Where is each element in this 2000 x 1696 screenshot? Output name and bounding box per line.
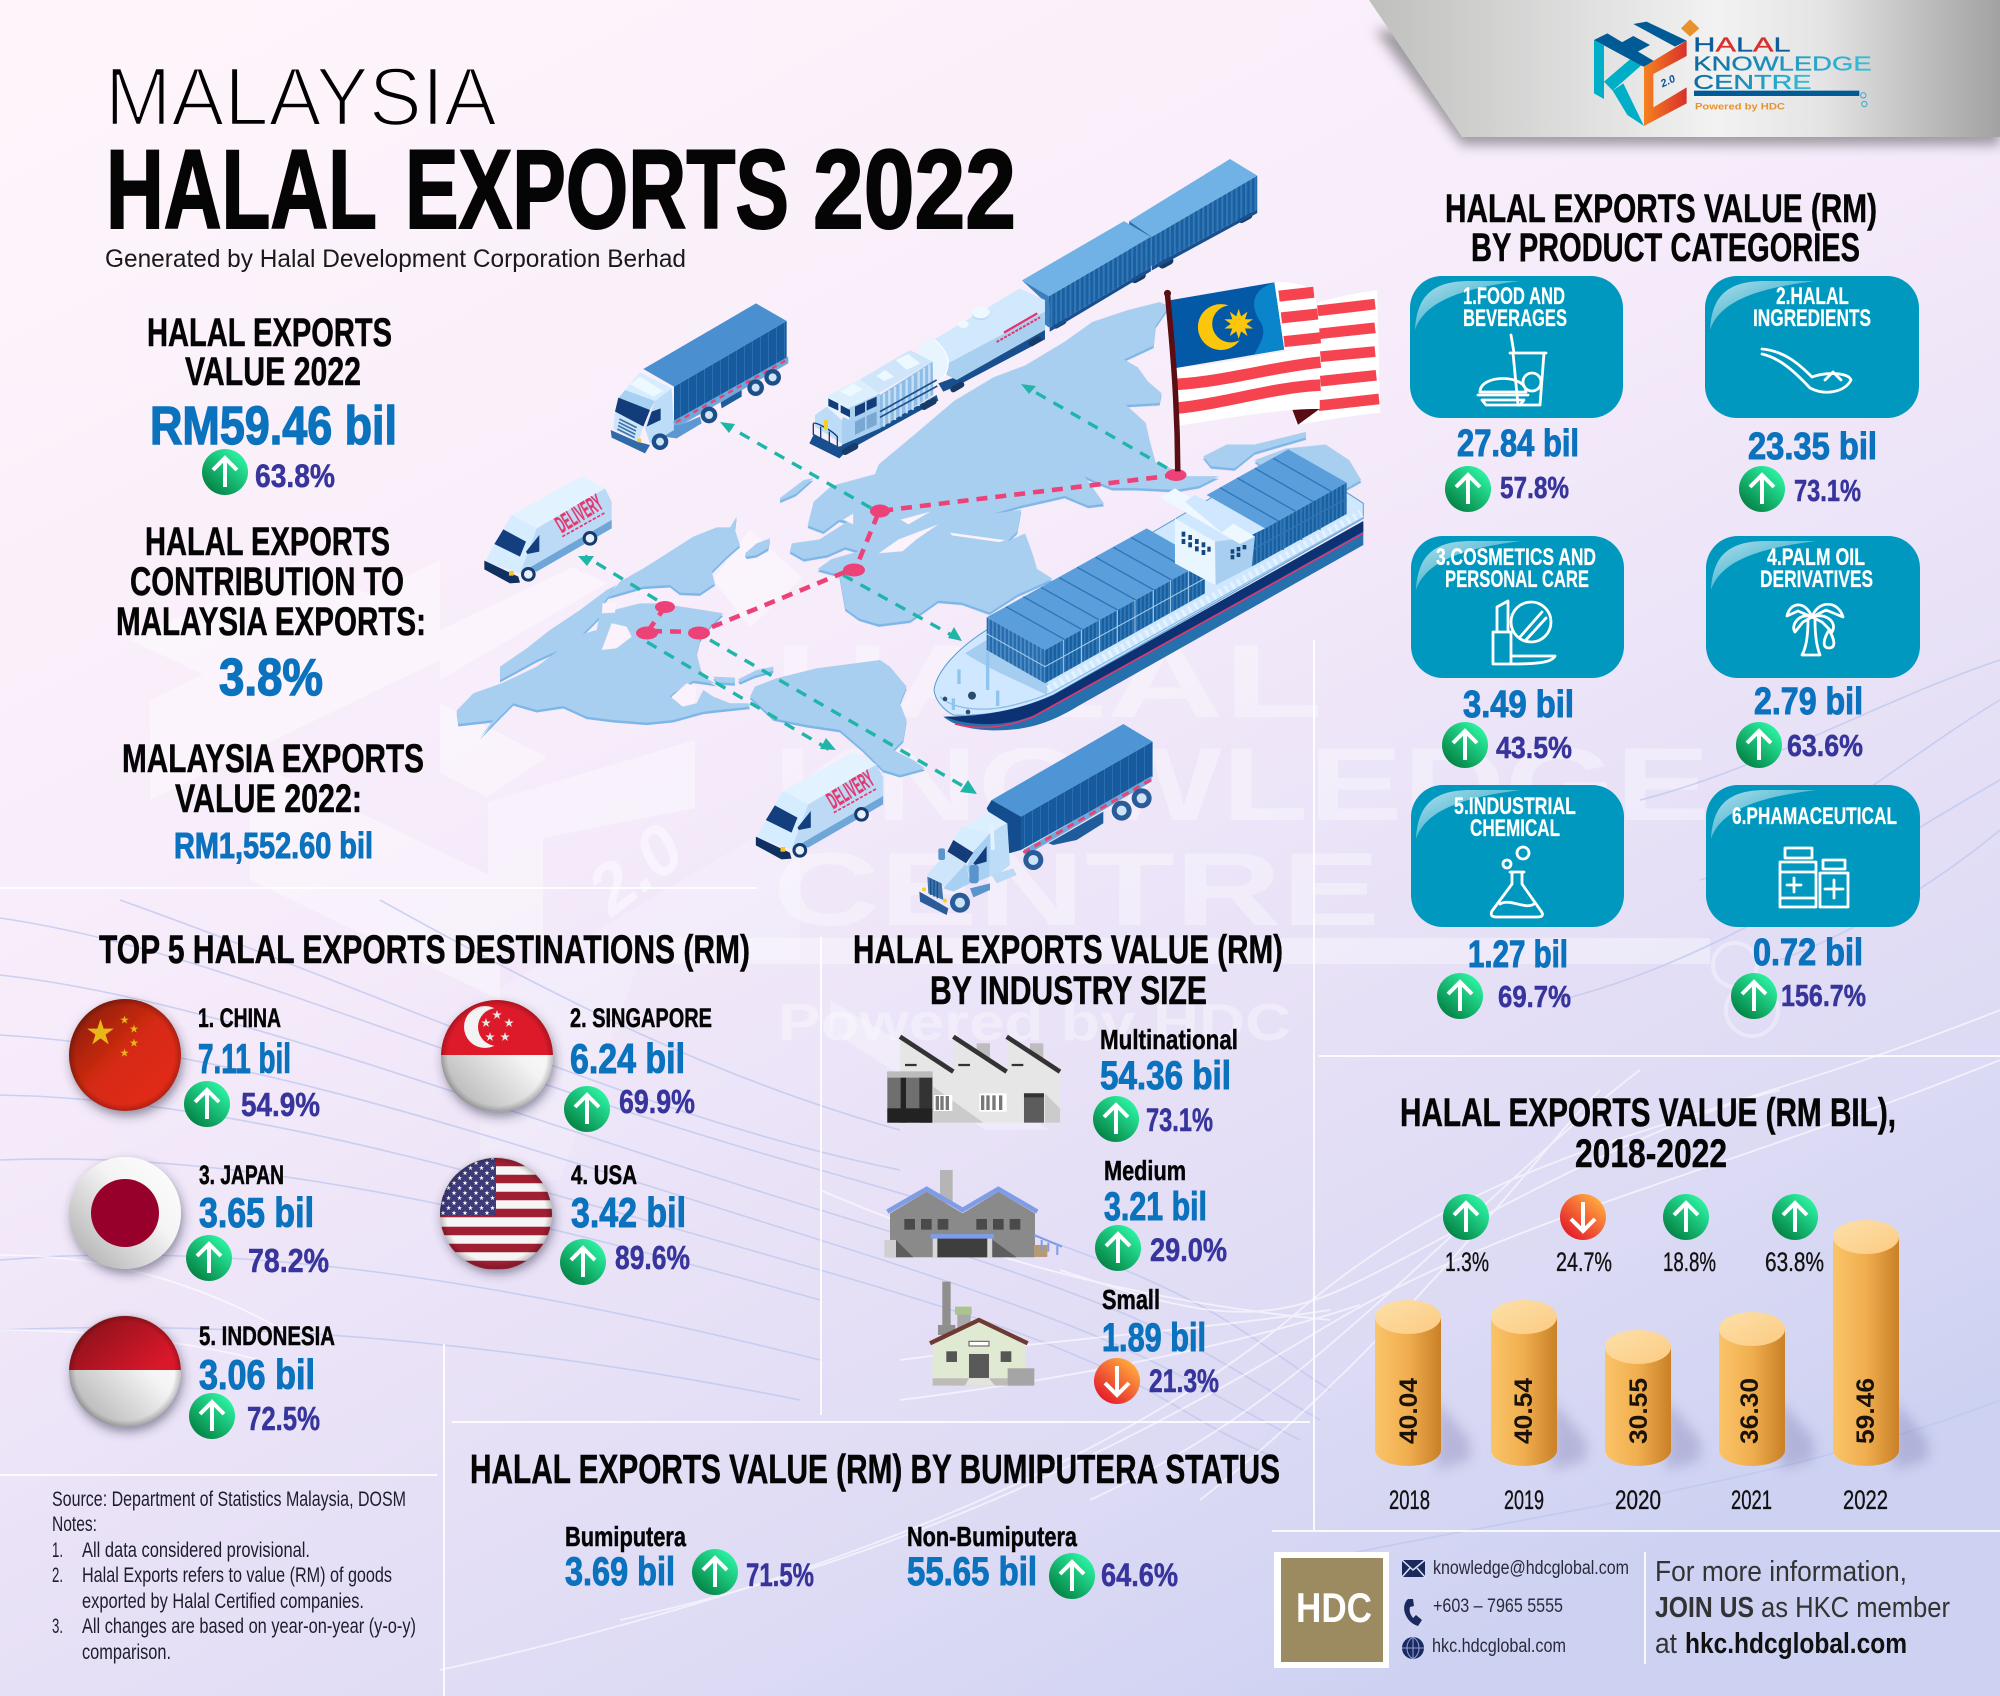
call to action: hkc.hdcglobal.com [1685,1628,1907,1660]
stat: Malaysia exports value 2022: MALAYSIA EXPORTS [122,737,424,781]
card: industrial chemical: 5.INDUSTRIAL [1454,793,1576,820]
year axis labels: 2019 [1504,1485,1544,1515]
title: Generated by Halal Development Corporation Berhad [105,245,686,273]
icon: lipstick and compact [1493,601,1555,664]
destination: China [69,999,320,1127]
icon: China flag [69,999,181,1111]
stat: medium: Medium [1104,1155,1186,1186]
card: food and beverages: 57.8% [1500,470,1569,505]
chart: yearly change indicators [1443,1194,1824,1277]
stat: halal exports value 2022: 63.8% [255,458,335,494]
card: industrial chemical [1411,785,1624,1019]
year axis labels: 2022 [1843,1485,1888,1515]
card: halal ingredients: 23.35 bil [1748,426,1877,468]
year axis labels [1389,1485,1888,1515]
background flowing wave lines [0,660,2000,1670]
bar 2021 [1719,1312,1785,1466]
icon: globe [1402,1637,1424,1659]
teal arrow heads [578,384,1036,794]
icon: medicine bottles [1780,848,1848,907]
stat: multinational [1093,1024,1238,1142]
icon: Singapore flag [441,1000,553,1112]
section heading: top 5 destinations: TOP 5 HALAL EXPORTS DESTINATIONS (RM) [99,928,750,972]
card: pharmaceutical: 0.72 bil [1753,932,1863,974]
container ship [934,449,1363,730]
call to action: at [1655,1628,1677,1660]
bar 2020 [1605,1330,1671,1466]
icon: spoon [1762,349,1851,392]
icon: small factory [930,1282,1034,1386]
watermark: HALAL KNOWLEDGE CENTRE wordmark: KNOWLEDGE [773,727,1710,843]
chart: yearly change indicators: 24.7% [1556,1247,1612,1277]
stat: contribution to Malaysia exports: MALAYSIA EXPORTS: [116,600,426,644]
icon: palm tree with drop [1787,604,1843,655]
stat: contribution to Malaysia exports: CONTRIBUTION TO [130,560,404,604]
watermark: HALAL KNOWLEDGE CENTRE wordmark: Powered by HDC [778,994,1291,1052]
card: halal ingredients: 2.HALAL [1776,283,1849,310]
stat: Malaysia exports value 2022: VALUE 2022: [175,777,362,821]
stat: contribution to Malaysia exports: 3.8% [219,649,323,707]
truck bottom cab [919,812,1017,915]
world map [457,302,1361,775]
stat: Bumiputera: Bumiputera [565,1521,686,1552]
year axis labels: 2021 [1731,1485,1772,1515]
title: HALAL [106,127,377,252]
stat: Non-Bumiputera: Non-Bumiputera [907,1521,1077,1552]
logo: Halal Knowledge Centre: CENTRE [1693,71,1812,94]
icon: multinational factory [887,1037,1060,1123]
card: cosmetics and personal care [1411,536,1624,768]
destination: Singapore [441,1000,712,1132]
card: cosmetics and personal care: 3.49 bil [1463,684,1574,726]
call to action [1655,1556,1950,1660]
card: food and beverages: 1.FOOD AND [1463,283,1565,310]
icon: USA flag [440,1156,552,1269]
card: palm oil derivatives: 63.6% [1787,728,1863,763]
card: halal ingredients [1705,276,1919,512]
title: 2022 [813,127,1016,252]
cargo train: wagons [1022,159,1257,332]
section heading: yearly chart: 2018-2022 [1575,1132,1727,1176]
card: industrial chemical: CHEMICAL [1470,815,1560,842]
icon: Indonesia flag [69,1315,181,1427]
section heading: product categories: BY PRODUCT CATEGORIES [1471,226,1860,270]
destination: Indonesia: 72.5% [247,1400,320,1437]
stat: halal exports value 2022: VALUE 2022 [185,350,361,394]
destination: Japan: 78.2% [248,1242,329,1279]
card: food and beverages: 27.84 bil [1457,423,1579,465]
card: halal ingredients: 73.1% [1794,473,1861,508]
year axis labels: 2020 [1615,1485,1661,1515]
bar 2021: 36.30 [1736,1378,1764,1444]
stat: halal exports value 2022: HALAL EXPORTS [147,311,392,355]
bar 2018: 40.04 [1395,1378,1423,1444]
divider lines [0,640,2000,1696]
logo: HDC: HDC [1296,1584,1372,1631]
destination: Indonesia: 3.06 bil [199,1351,315,1398]
source and notes: Notes: [52,1513,97,1536]
card: palm oil derivatives [1706,536,1920,768]
destination: USA: 89.6% [615,1239,690,1276]
delivery van 2 [756,752,883,859]
stat: Bumiputera [565,1521,814,1595]
bar 2022: 59.46 [1852,1378,1880,1444]
year axis labels: 2018 [1389,1485,1430,1515]
stat: Non-Bumiputera: 55.65 bil [907,1550,1037,1594]
source and notes [52,1488,416,1664]
source and notes: Source: Department of Statistics Malaysia, DOSM [52,1488,406,1511]
bar 2022 [1833,1220,1899,1466]
logo: Halal Knowledge Centre: Powered by HDC [1695,101,1786,111]
stat: multinational: Multinational [1100,1024,1238,1055]
source and notes: All data considered provisional. [82,1539,310,1562]
stat: contribution to Malaysia exports [116,520,426,707]
section heading: by industry size: HALAL EXPORTS VALUE (RM) [853,928,1283,972]
source and notes: comparison. [82,1641,171,1664]
icon: medium factory [884,1170,1062,1257]
delivery van 2: DELIVERY [822,766,879,814]
card: pharmaceutical: 6.PHAMACEUTICAL [1732,803,1897,830]
watermark: 2.0: 2.0 [572,808,698,931]
destination: China: 54.9% [241,1086,320,1123]
source and notes: exported by Halal Certified companies. [82,1590,364,1613]
chart: cylinder bars 2018-2022 [1375,1220,1928,1515]
destination: Japan: 3. JAPAN [199,1160,284,1190]
chart: yearly change indicators: 1.3% [1445,1247,1489,1277]
truck bottom trailer [987,724,1153,870]
source and notes: 3. [52,1615,63,1638]
destination: Japan [69,1157,329,1281]
bar 2019 [1491,1300,1557,1466]
card: cosmetics and personal care: 43.5% [1496,730,1572,765]
card: food and beverages: BEVERAGES [1463,305,1567,332]
chart: yearly change indicators: 63.8% [1765,1247,1824,1277]
card: palm oil derivatives: 2.79 bil [1754,681,1863,723]
source and notes: All changes are based on year-on-year (y-o-y) [82,1615,416,1638]
truck top [611,303,788,453]
bar 2018 [1375,1300,1441,1466]
card: industrial chemical: 1.27 bil [1468,934,1568,976]
stat: Malaysia exports value 2022: RM1,552.60 bil [174,825,373,866]
title: EXPORTS [405,127,789,252]
destination: Singapore: 2. SINGAPORE [570,1003,712,1033]
stat: contribution to Malaysia exports: HALAL EXPORTS [145,520,390,564]
icon: phone [1404,1599,1422,1626]
logo: HDC [1274,1552,1389,1668]
destination: USA [440,1156,690,1285]
delivery van 1 [484,476,612,583]
section heading: by industry size [853,928,1283,1013]
icon: Japan flag [69,1157,181,1269]
stat: small: 1.89 bil [1102,1316,1206,1360]
watermark: HALAL KNOWLEDGE CENTRE wordmark [600,624,1778,1052]
card: pharmaceutical [1706,785,1920,1019]
destination: USA: 3.42 bil [571,1189,686,1236]
icon: email [1402,1560,1425,1577]
destination: Indonesia [69,1315,335,1439]
card: food and beverages [1410,276,1623,512]
logo: Halal Knowledge Centre: KNOWLEDGE [1693,53,1872,76]
icon: chemistry flask [1491,847,1542,917]
stat: medium [1095,1155,1227,1271]
logo: Halal Knowledge Centre: HALAL [1693,34,1791,57]
delivery van 1: DELIVERY [551,490,608,538]
destination: Indonesia: 5. INDONESIA [199,1321,335,1351]
contact details: hkc.hdcglobal.com [1432,1636,1566,1657]
stat: small: Small [1102,1284,1160,1315]
section heading: product categories [1445,187,1877,270]
stat: halal exports value 2022: RM59.46 bil [150,396,397,456]
chart: yearly change indicators: 18.8% [1663,1247,1716,1277]
destination: Singapore: 69.9% [619,1083,695,1120]
top-right grey banner [1369,0,2000,145]
source and notes: 1. [52,1539,63,1562]
title [105,50,1016,273]
Malaysian flag on pole [1164,282,1380,471]
card: palm oil derivatives: 4.PALM OIL [1767,544,1865,571]
watermark: HALAL KNOWLEDGE CENTRE wordmark: CENTRE [773,832,1380,948]
stat: small [1094,1284,1219,1404]
teal dashed arrows [585,388,1167,789]
pink route lines and nodes [636,469,1186,640]
stat: Bumiputera: 71.5% [746,1557,814,1593]
source and notes: Halal Exports refers to value (RM) of goods [82,1564,392,1587]
card: palm oil derivatives: DERIVATIVES [1760,566,1873,593]
contact details: +603 – 7965 5555 [1433,1596,1563,1617]
source and notes: 2. [52,1564,63,1587]
icon: burger and drink [1478,335,1546,405]
section heading: yearly chart [1400,1091,1896,1176]
stat: Non-Bumiputera: 64.6% [1101,1557,1178,1593]
bar 2019: 40.54 [1510,1378,1538,1444]
stat: multinational: 54.36 bil [1100,1054,1231,1098]
destination: Japan: 3.65 bil [199,1189,314,1236]
call to action: as HKC member [1761,1592,1950,1624]
stat: Non-Bumiputera [907,1521,1178,1599]
call to action: For more information, [1655,1556,1907,1588]
logo: Halal Knowledge Centre: 2.0 [1658,73,1677,90]
stat: multinational: 73.1% [1146,1102,1213,1138]
call to action: JOIN US [1655,1592,1754,1624]
destination: China: 7.11 bil [198,1035,291,1082]
bar 2020: 30.55 [1625,1378,1653,1444]
section heading: by industry size: BY INDUSTRY SIZE [930,969,1207,1013]
title: MALAYSIA [105,50,498,143]
card: cosmetics and personal care: 3.COSMETICS AND [1436,544,1596,571]
destination: Singapore: 6.24 bil [570,1035,685,1082]
stat: medium: 3.21 bil [1104,1185,1207,1229]
destination: China: 1. CHINA [198,1003,281,1033]
contact details [1402,1558,1629,1659]
map sea gaps [602,512,1005,706]
card: pharmaceutical: 156.7% [1781,978,1866,1013]
stat: halal exports value 2022 [147,311,397,495]
destination: USA: 4. USA [571,1160,637,1190]
card: industrial chemical: 69.7% [1498,979,1571,1014]
logo: Halal Knowledge Centre [1594,19,1872,126]
contact details: knowledge@hdcglobal.com [1433,1558,1629,1579]
watermark: HKC logo shapes [130,529,1050,1180]
section heading: Bumiputera status: HALAL EXPORTS VALUE (RM) BY BUMIPUTERA STATUS [470,1446,1280,1492]
stat: small: 21.3% [1149,1363,1219,1399]
card: cosmetics and personal care: PERSONAL CARE [1445,566,1589,593]
card: halal ingredients: INGREDIENTS [1753,305,1871,332]
stat: Bumiputera: 3.69 bil [565,1550,675,1594]
watermark: HALAL KNOWLEDGE CENTRE wordmark: HALAL [773,624,1323,740]
stat: medium: 29.0% [1150,1232,1227,1268]
stat: Malaysia exports value 2022 [122,737,424,866]
cargo train: tanker and locomotive [809,288,1045,458]
